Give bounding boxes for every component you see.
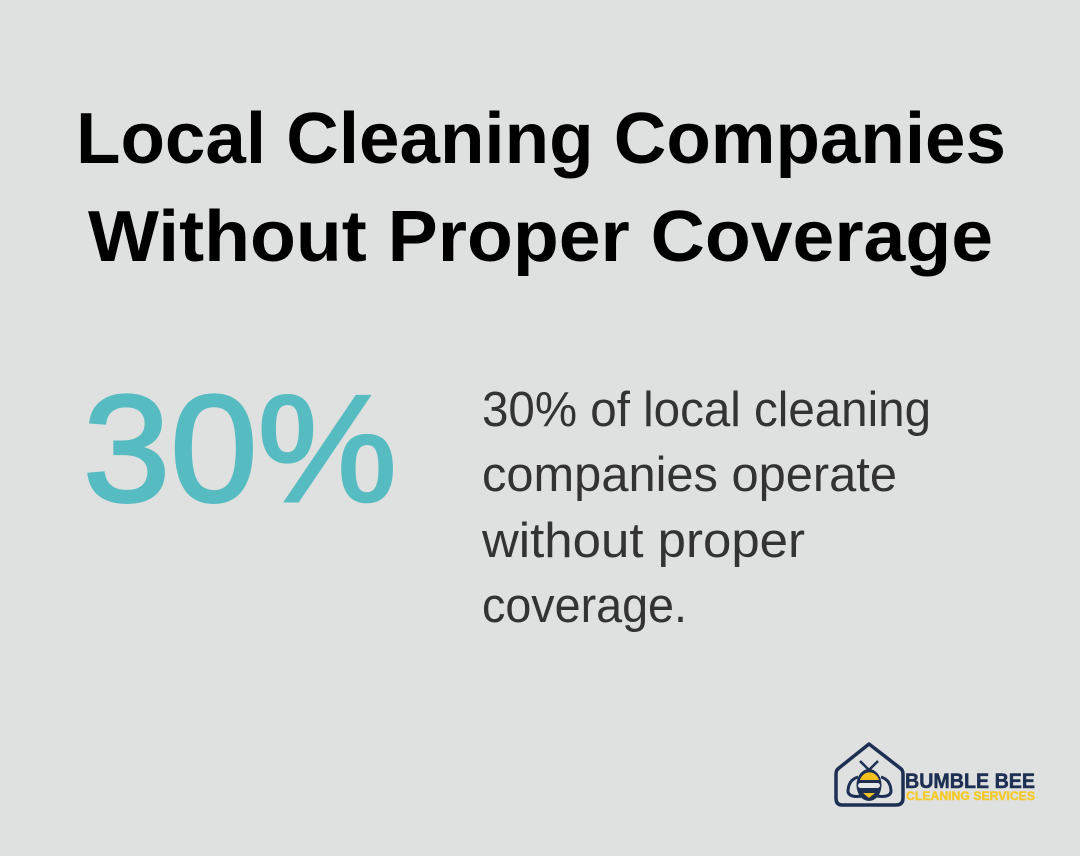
title: Without Proper Coverage	[88, 197, 993, 277]
description text: without proper	[481, 514, 805, 568]
title	[76, 99, 1006, 277]
title: Local Cleaning Companies	[76, 99, 1006, 179]
icon: house outline	[836, 744, 903, 805]
description text: 30% of local cleaning	[482, 383, 931, 437]
description text	[481, 383, 931, 633]
description text: coverage.	[482, 579, 687, 633]
logo wordmark: BUMBLE BEE	[905, 770, 1035, 793]
description text: companies operate	[482, 448, 897, 502]
logo: Bumble Bee Cleaning Services	[836, 744, 1035, 805]
big statistic: 30%: 30%	[83, 364, 397, 534]
logo tagline: CLEANING SERVICES	[906, 789, 1035, 803]
icon: bee	[848, 761, 891, 801]
